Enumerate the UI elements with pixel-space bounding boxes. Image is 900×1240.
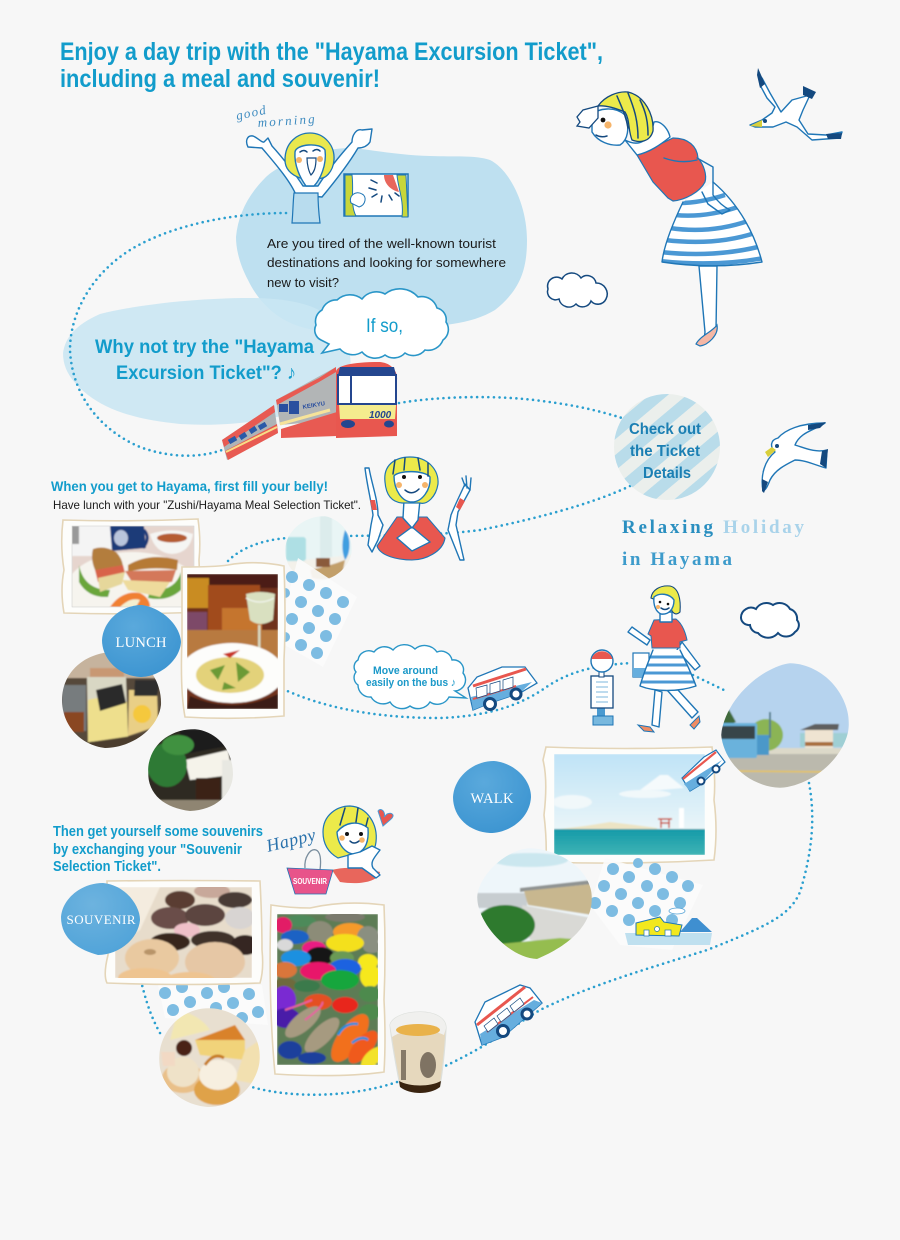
script heading: relaxing holiday in Hayama: [622, 517, 804, 570]
illustration: red train: [222, 362, 397, 460]
illustration: cloud right: [741, 603, 799, 638]
section heading: souvenirs: Selection Ticket".: [53, 859, 161, 875]
neck and shoulder: [625, 122, 670, 155]
script heading: relaxing holiday in Hayama: in Hayama: [622, 549, 732, 570]
photo: sandwich card: [60, 518, 201, 615]
blob label: souvenir: SOUVENIR: [66, 912, 136, 927]
arm on hip: [697, 158, 730, 214]
dotted route lines: [70, 213, 812, 1095]
icon: blue bus lower: [475, 985, 542, 1045]
handwritten greeting: good: [235, 102, 267, 123]
blob label: lunch: LUNCH: [116, 635, 167, 651]
legs: [699, 266, 717, 340]
section heading: lunch: [51, 478, 361, 512]
polka dot paper: walk: [589, 858, 703, 950]
illustration: happy girl with souvenir bag: SOUVENIR: [293, 877, 327, 886]
photo: restaurant entrance circle: [147, 729, 234, 812]
photo: pasta card: [180, 563, 285, 718]
blob label: walk: [453, 761, 531, 833]
icon: bus: [468, 667, 537, 710]
speech bubble: if so: If so,: [366, 316, 403, 337]
invitation heading: Excursion Ticket"? ♪: [116, 362, 296, 384]
photo: jars circle: [60, 650, 164, 750]
photo: cakes circle: [159, 1008, 260, 1108]
illustration: leaning girl: [577, 92, 764, 346]
face: [592, 109, 628, 145]
callout: check out the ticket details: Details: [643, 465, 691, 482]
question text: [267, 236, 506, 290]
invitation heading: Why not try the "Hayama: [95, 336, 314, 358]
icon: small bus on photo: [682, 750, 725, 791]
watercolor blob: morning question: [236, 148, 527, 332]
hair: [598, 92, 653, 141]
callout: check out the ticket details: [614, 394, 720, 500]
illustration: good morning girl with window: [235, 102, 408, 223]
callout: check out the ticket details: Check out: [629, 421, 702, 438]
photo: seaside museum circle: [475, 848, 592, 960]
question text: destinations and looking for somewhere: [267, 255, 506, 270]
photo: pudding cup: [390, 1012, 446, 1093]
invitation heading: [95, 336, 314, 384]
section heading: souvenirs: [53, 824, 263, 875]
title: [60, 38, 603, 93]
illustration: yellow house and Mt Fuji: [625, 908, 712, 945]
polka dot paper: souvenir: [158, 981, 268, 1025]
photo: glass and table circle: [285, 516, 352, 582]
photo: donuts card: [105, 880, 263, 988]
callout: check out the ticket details: the Ticket: [630, 443, 701, 460]
speech bubble: if so: [315, 289, 448, 358]
section heading: lunch: Have lunch with your "Zushi/Hayama Meal Selection Ticket".: [53, 498, 361, 512]
handwritten greeting: [235, 102, 316, 130]
illustration: red train: KEIKYU: [302, 401, 326, 411]
question text: Are you tired of the well-known tourist: [267, 236, 496, 251]
title: including a meal and souvenir!: [60, 65, 380, 93]
photo: flip flops card: [270, 903, 387, 1076]
section heading: souvenirs: Then get yourself some souvenirs: [53, 824, 263, 840]
illustration: happy girl with souvenir bag: [263, 806, 393, 894]
skirt: [660, 182, 764, 266]
handwritten greeting: morning: [257, 111, 316, 130]
polka dot paper: lunch: [276, 558, 357, 667]
illustration: seagull top: [750, 68, 842, 140]
top: [637, 138, 706, 201]
photo: bus stop on the coast: [721, 663, 849, 788]
illustration: red train: 1000: [369, 410, 392, 421]
script heading: relaxing holiday in Hayama: Relaxing Holiday: [622, 517, 804, 538]
question text: new to visit?: [267, 275, 339, 290]
icon: bus stop sign: [591, 650, 613, 725]
hand: [577, 106, 598, 128]
blob label: souvenir: [61, 883, 140, 955]
blob label: lunch: [102, 605, 181, 677]
speech bubble: move around: [354, 645, 466, 709]
section heading: lunch: When you get to Hayama, first fill your belly!: [51, 478, 328, 494]
photo: sea, torii and Mt Fuji card: [543, 747, 716, 863]
illustration: seagull lower: [762, 422, 828, 493]
title: Enjoy a day trip with the "Hayama Excursion Ticket",: [60, 38, 603, 66]
watercolor blob: invitation: [63, 298, 350, 425]
illustration: walking girl: [628, 586, 700, 732]
illustration: happy girl with souvenir bag: Happy: [263, 824, 317, 856]
speech bubble: move around: easily on the bus ♪: [366, 677, 456, 689]
illustration: cloud: [547, 273, 607, 307]
blob label: walk: WALK: [470, 791, 514, 807]
speech bubble: move around: Move around: [373, 665, 438, 677]
illustration: girl with knife and fork: [365, 457, 471, 560]
section heading: souvenirs: by exchanging your "Souvenir: [53, 842, 242, 858]
